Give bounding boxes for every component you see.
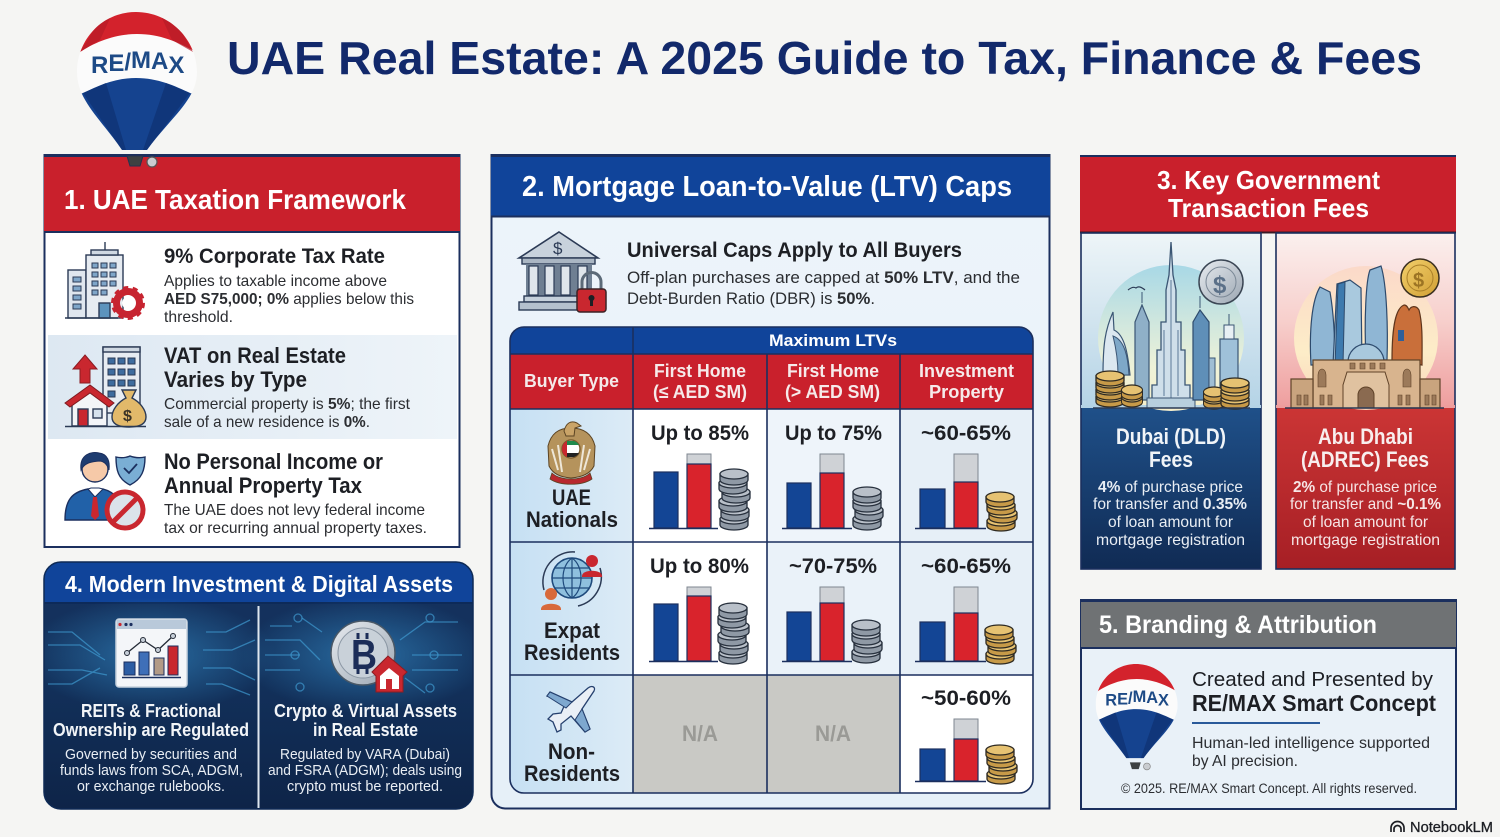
illustration: Abu Dhabi skyline with palace: $ [1413, 270, 1424, 292]
text: REITs and fractional ownership: Ownership are Regulated [53, 720, 249, 740]
heading: panel 3: 3. Key Government [1157, 165, 1380, 195]
cell: non-residents first home not available: N/A [682, 721, 718, 746]
text: no personal income or annual property tax: Annual Property Tax [164, 473, 363, 498]
text: VAT on real estate [164, 343, 411, 431]
illustration: Dubai skyline with coins: $ [1213, 272, 1227, 299]
cell: nationals first home up to 85% [649, 422, 750, 530]
cell: expats first home 70-75%: ~70-75% [789, 555, 877, 578]
panel 2: mortgage loan-to-value caps [491, 155, 1050, 808]
table: maximum LTVs by buyer type [510, 327, 1033, 793]
text: crypto and virtual assets: Crypto & Virtual Assets [274, 701, 457, 721]
row label: expat residents with globe [524, 552, 620, 665]
icon: house, tower, arrow and money bag: $ [123, 408, 132, 425]
cell: nationals first home up to 85%: Up to 85% [651, 422, 749, 445]
icon: bank with padlock [519, 232, 606, 312]
table header: buyer type: Buyer Type [524, 371, 619, 391]
text: attribution: RE/MAX Smart Concept [1192, 690, 1436, 716]
logo: RE/MAX hot-air balloon: RE/MAX [91, 47, 184, 79]
card: Abu Dhabi ADREC fees [1276, 233, 1455, 569]
text: VAT on real estate: Commercial property is 5%; the first [164, 396, 411, 413]
text: Dubai fee details: for transfer and 0.35% [1093, 496, 1247, 513]
text: crypto and virtual assets: and FSRA (ADGM); deals using [268, 763, 462, 779]
icon: analytics window chart [116, 619, 187, 687]
panel 4: modern investment and digital assets [26, 562, 491, 809]
text: Abu Dhabi fee details: 2% of purchase price [1293, 479, 1437, 496]
heading: panel 3: Transaction Fees [1168, 193, 1369, 223]
watermark: NotebookLM: NotebookLM [1410, 820, 1493, 836]
text: 9% corporate tax rate: AED S75,000; 0% applies below this [164, 291, 414, 308]
text: no personal income or annual property tax: tax or recurring annual property taxes. [164, 520, 427, 537]
text: REITs and fractional ownership: funds laws from SCA, ADGM, [60, 763, 243, 779]
cell: nationals first home up to 75% [782, 422, 883, 530]
text: Dubai fee details: Fees [1149, 447, 1193, 472]
title: UAE Real Estate: A 2025 Guide to Tax, Finance & Fees [227, 32, 1422, 84]
text: 9% corporate tax rate [164, 245, 414, 326]
text: copyright: © 2025. RE/MAX Smart Concept. All rights reserved. [1121, 781, 1417, 796]
text: attribution [1192, 669, 1436, 770]
cell: nationals first home up to 75%: Up to 75% [785, 422, 882, 445]
text: Dubai fee details: mortgage registration [1096, 532, 1245, 549]
row label: non-residents with airplane: Residents [524, 761, 620, 786]
text: REITs and fractional ownership: Governed by securities and [65, 747, 237, 763]
row label: non-residents with airplane: Non- [548, 739, 595, 764]
text: universal caps: Debt-Burden Ratio (DBR) is 50%. [627, 289, 875, 308]
cell: non-residents investment 50-60% [915, 687, 1017, 784]
table header: first home above AED 5M: (> AED SM) [785, 382, 880, 402]
text: Abu Dhabi fee details: Abu Dhabi [1318, 424, 1413, 449]
logo: RE/MAX hot-air balloon [80, 12, 193, 168]
icon: bank with padlock: $ [553, 239, 563, 258]
panel 1: UAE taxation framework [44, 155, 460, 547]
heading: panel 3 [1157, 165, 1380, 223]
heading: panel 2: 2. Mortgage Loan-to-Value (LTV) Caps [522, 171, 1012, 203]
icon: bitcoin coin with house badge [331, 621, 407, 692]
text: Abu Dhabi fee details: of loan amount for [1303, 514, 1429, 531]
table header: maximum LTVs: Maximum LTVs [769, 331, 897, 350]
panel 3: key government transaction fees [1080, 155, 1456, 569]
text: crypto and virtual assets: in Real Estate [313, 720, 418, 740]
table header: investment property [919, 361, 1014, 402]
cell: expats investment 60-65%: ~60-65% [921, 555, 1011, 578]
illustration: Dubai skyline with coins [1093, 242, 1250, 409]
cell: non-residents investment 50-60%: ~50-60% [921, 687, 1011, 710]
text: Dubai fee details: Dubai (DLD) [1116, 424, 1226, 449]
text: VAT on real estate: Varies by Type [164, 367, 307, 392]
text: attribution: Human-led intelligence supported [1192, 735, 1430, 752]
panel 5: branding and attribution [1081, 600, 1456, 809]
text: REITs and fractional ownership: or exchange rulebooks. [77, 779, 225, 795]
text: universal caps: Off-plan purchases are capped at 50% LTV, and the [627, 268, 1020, 287]
heading: panel 4: 4. Modern Investment & Digital Assets [65, 571, 453, 597]
icon: bitcoin coin with house badge: B [351, 631, 377, 678]
table header: first home above AED 5M [785, 361, 880, 402]
cell: expats first home 70-75% [782, 555, 882, 663]
text: REITs and fractional ownership [53, 701, 249, 795]
row label: UAE nationals with emblem [526, 422, 618, 532]
text: universal caps [627, 239, 1020, 308]
row label: expat residents with globe: Residents [524, 640, 620, 665]
text: crypto and virtual assets: crypto must be reported. [287, 779, 443, 795]
text: universal caps: Universal Caps Apply to All Buyers [627, 239, 962, 262]
text: no personal income or annual property tax: No Personal Income or [164, 449, 383, 474]
text: Dubai fee details [1093, 424, 1247, 549]
table header: investment property: Investment [919, 361, 1014, 381]
heading: panel 1: 1. UAE Taxation Framework [64, 184, 406, 215]
text: Abu Dhabi fee details [1290, 424, 1441, 549]
row label: non-residents with airplane [524, 687, 620, 786]
icon: house, tower, arrow and money bag [65, 347, 146, 427]
heading: panel 5: 5. Branding & Attribution [1099, 611, 1377, 639]
icon: person, shield and prohibition sign [65, 452, 145, 528]
logo: small RE/MAX balloon [1096, 664, 1178, 770]
text: crypto and virtual assets [268, 701, 462, 795]
text: Dubai fee details: of loan amount for [1108, 514, 1234, 531]
illustration: Abu Dhabi skyline with palace [1285, 259, 1444, 408]
logo: small RE/MAX balloon: RE/MAX [1105, 688, 1169, 710]
text: Abu Dhabi fee details: mortgage registration [1291, 532, 1440, 549]
text: 9% corporate tax rate: Applies to taxable income above [164, 273, 387, 290]
text: 9% corporate tax rate: threshold. [164, 309, 233, 326]
text: no personal income or annual property tax [164, 449, 427, 537]
text: VAT on real estate: sale of a new residence is 0%. [164, 414, 370, 431]
text: crypto and virtual assets: Regulated by VARA (Dubai) [280, 747, 450, 763]
row label: UAE nationals with emblem: Nationals [526, 507, 618, 532]
row label: expat residents with globe: Expat [544, 618, 601, 643]
cell: expats first home up to 80% [649, 555, 749, 664]
text: VAT on real estate: VAT on Real Estate [164, 343, 346, 368]
card: Dubai DLD fees [1081, 233, 1261, 569]
cell: expats first home up to 80%: Up to 80% [650, 555, 749, 578]
table header: first home at or below AED 5M [653, 361, 747, 402]
text: attribution: by AI precision. [1192, 753, 1298, 770]
table header: first home at or below AED 5M: First Home [654, 361, 746, 381]
text: attribution: Created and Presented by [1192, 669, 1433, 691]
text: Abu Dhabi fee details: (ADREC) Fees [1301, 447, 1429, 472]
text: no personal income or annual property tax: The UAE does not levy federal income [164, 502, 425, 519]
text: Dubai fee details: 4% of purchase price [1098, 479, 1243, 496]
cell: nationals investment 60-65%: ~60-65% [921, 422, 1011, 445]
row label: UAE nationals with emblem: UAE [552, 485, 591, 510]
cell: non-residents first home above 5M not available: N/A [815, 721, 851, 746]
icon: corporate building with gear [65, 242, 143, 318]
text: Abu Dhabi fee details: for transfer and ~0.1% [1290, 496, 1441, 513]
table header: first home above AED 5M: First Home [787, 361, 879, 381]
cell: expats investment 60-65% [915, 555, 1016, 664]
text: REITs and fractional ownership: REITs & Fractional [81, 701, 221, 721]
cell: nationals investment 60-65% [915, 422, 1017, 531]
table header: investment property: Property [929, 382, 1004, 402]
table header: first home at or below AED 5M: (≤ AED SM) [653, 382, 747, 402]
text: 9% corporate tax rate: 9% Corporate Tax Rate [164, 245, 385, 268]
